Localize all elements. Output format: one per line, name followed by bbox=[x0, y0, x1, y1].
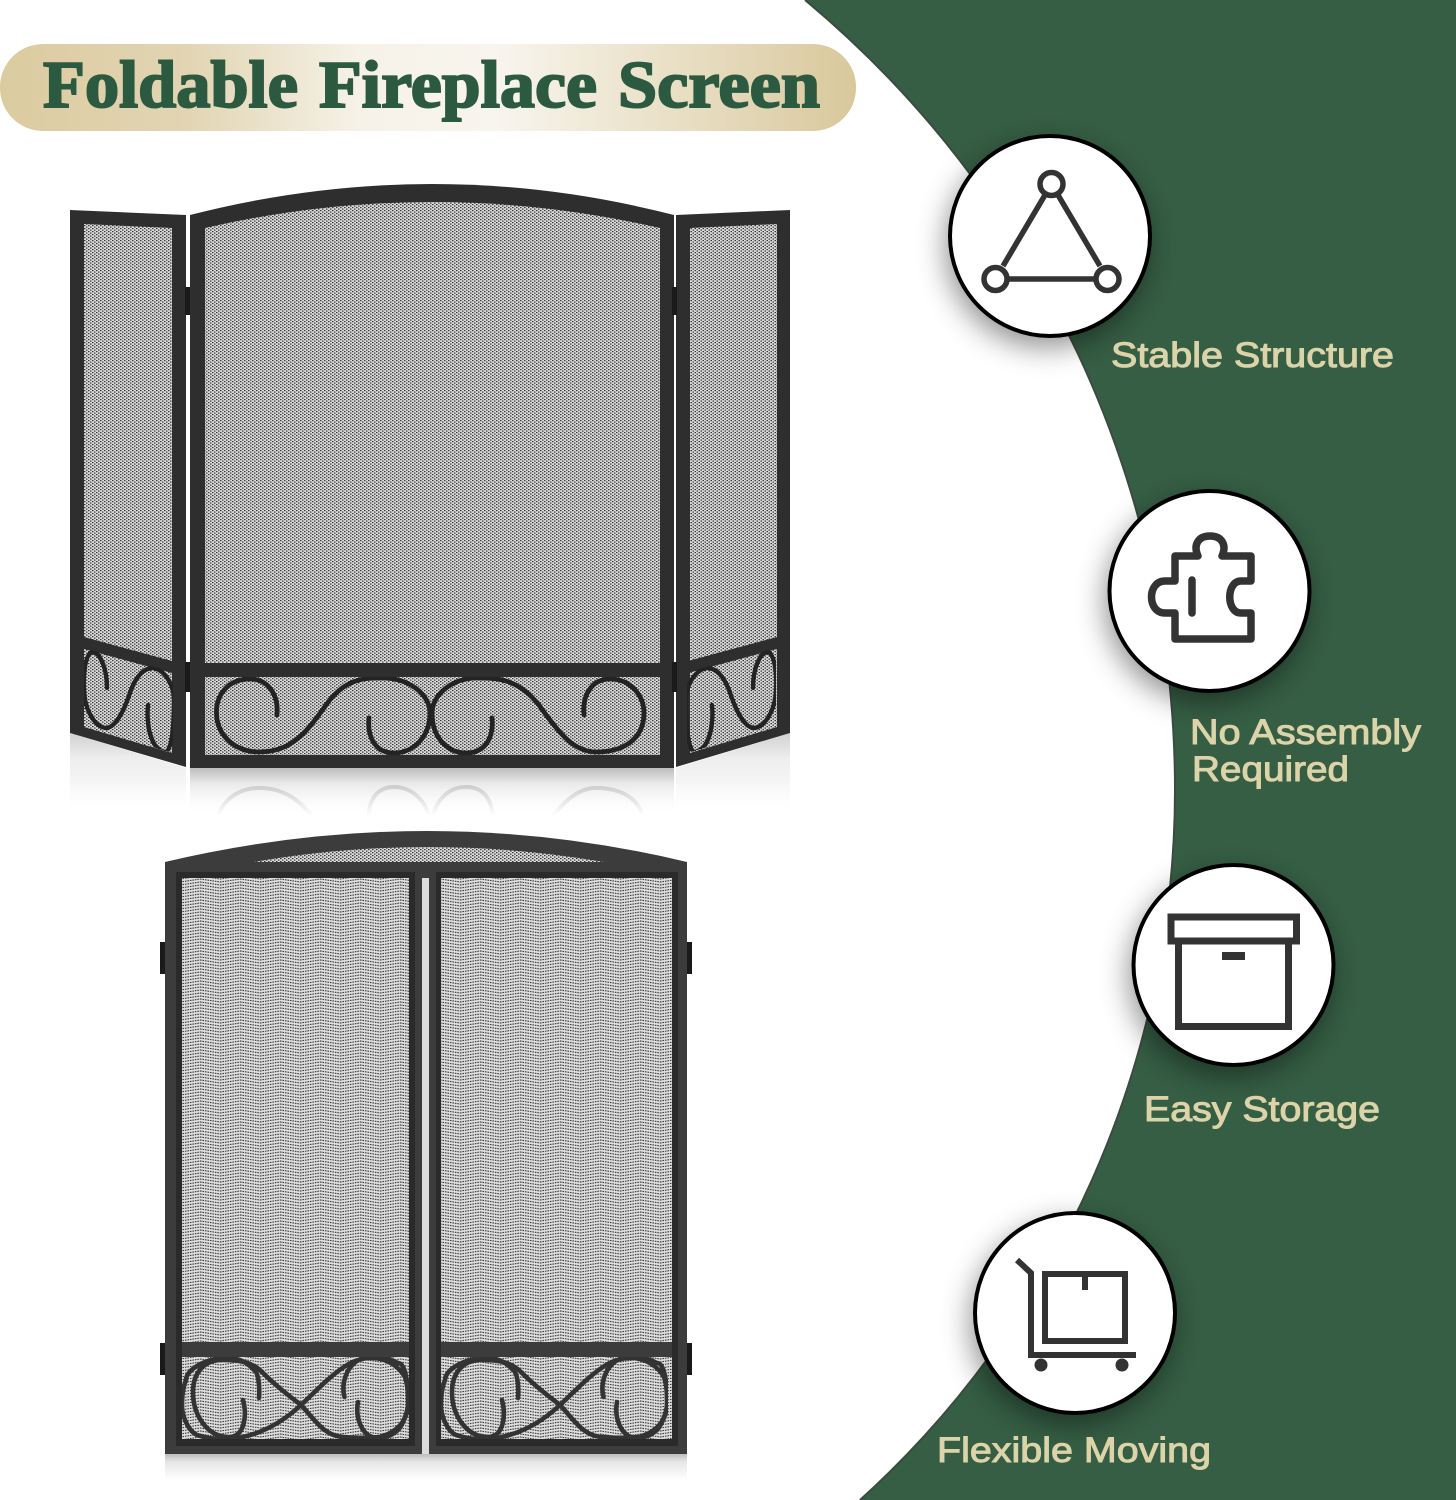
folded screen handles bbox=[160, 942, 692, 1375]
label: no assembly required: Required bbox=[1192, 750, 1349, 789]
title banner bbox=[0, 44, 856, 131]
right door bbox=[429, 862, 687, 1454]
label: easy storage: Easy Storage bbox=[1144, 1090, 1380, 1129]
open three-panel fireplace screen bbox=[70, 184, 790, 811]
left wing panel bbox=[70, 210, 186, 767]
label: no assembly required bbox=[1190, 713, 1422, 789]
left door bbox=[165, 862, 422, 1454]
hinges bbox=[185, 287, 677, 692]
icon: storage box bbox=[1134, 865, 1334, 1065]
label: no assembly required: No Assembly bbox=[1190, 713, 1422, 752]
feature: stable structure bbox=[950, 136, 1394, 375]
folded fireplace screen bbox=[160, 831, 692, 1480]
feature: flexible moving bbox=[937, 1213, 1211, 1470]
title banner: Screen bbox=[618, 48, 820, 122]
feature: easy storage bbox=[1134, 865, 1380, 1129]
feature: no assembly required bbox=[1110, 491, 1422, 789]
icon: hand cart bbox=[975, 1213, 1175, 1413]
arched back frame bbox=[165, 831, 687, 1454]
reflection of open screen bbox=[70, 733, 790, 811]
icon: puzzle piece bbox=[1110, 491, 1310, 691]
title banner: Foldable bbox=[43, 48, 298, 122]
green curved background panel bbox=[805, 0, 1456, 1500]
label: flexible moving: Flexible Moving bbox=[937, 1431, 1211, 1470]
label: stable structure: Stable Structure bbox=[1111, 336, 1394, 375]
right wing panel bbox=[676, 210, 790, 767]
folded screen reflection bbox=[165, 1454, 687, 1480]
title banner: Fireplace bbox=[319, 48, 597, 122]
centre panel bbox=[190, 184, 674, 768]
icon: triangle bbox=[950, 136, 1150, 336]
